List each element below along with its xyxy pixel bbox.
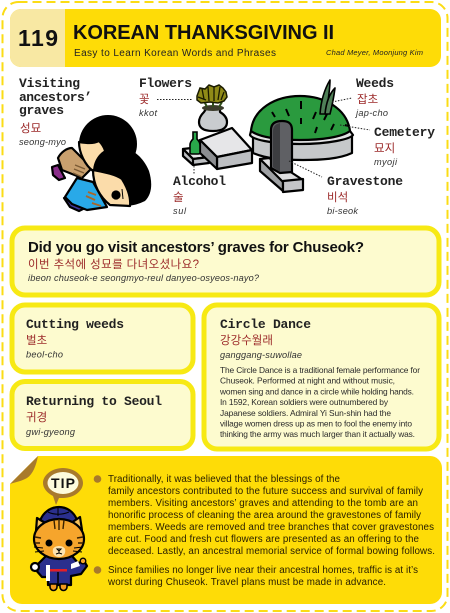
question Korean: 이번 추석에 성묘를 다녀오셨나요? bbox=[28, 258, 199, 271]
panel: returning to Seoul: Returning to Seoul bbox=[26, 394, 162, 409]
bullet one bbox=[94, 475, 101, 483]
illustration: stone altar and small table bbox=[183, 128, 252, 169]
label: Alcohol: Alcohol bbox=[173, 174, 226, 189]
tip text: honorific process of cleaning the area around the gravestones of family bbox=[108, 510, 421, 521]
subtitle: Easy to Learn Korean Words and Phrases bbox=[74, 48, 276, 59]
label: Gravestone bbox=[289, 161, 403, 216]
icon: tiger mascot bbox=[31, 507, 87, 590]
circle dance description: women sing and dance in a circle while holding hands. bbox=[219, 386, 414, 396]
panel: tip bbox=[10, 456, 442, 604]
panel: circle dance: Circle Dance bbox=[220, 317, 311, 332]
tip text: deceased. Lastly, an ancestral memorial service of formal bowing follows. bbox=[108, 546, 435, 557]
label: Flowers: 꽃 bbox=[139, 93, 150, 106]
label: Visiting ancestors' graves bbox=[19, 76, 92, 147]
label: Weeds: Weeds bbox=[356, 76, 394, 91]
icon: green bottle bbox=[190, 132, 200, 154]
label: Visiting ancestors' graves: Visiting bbox=[19, 76, 80, 91]
panel: circle dance bbox=[204, 305, 439, 449]
label: Gravestone: 비석 bbox=[327, 191, 348, 204]
label: Gravestone: bi-seok bbox=[327, 206, 358, 216]
question romanization: ibeon chuseok-e seongmyo-reul danyeo-osyeos-nayo? bbox=[28, 273, 260, 283]
issue number: 119 bbox=[18, 25, 58, 51]
illustration: flowers and vase bbox=[197, 85, 227, 131]
label: Visiting ancestors' graves: seong-myo bbox=[19, 137, 66, 147]
bullet two bbox=[94, 566, 101, 574]
authors: Chad Meyer, Moonjung Kim bbox=[326, 48, 423, 57]
panel: returning to Seoul: gwi-gyeong bbox=[26, 427, 76, 437]
panel: circle dance: ganggang-suwollae bbox=[220, 350, 302, 360]
label: Cemetery: myoji bbox=[374, 157, 398, 167]
panel: cutting weeds: Cutting weeds bbox=[26, 317, 124, 332]
tip text: worst during Chuseok. Travel plans must be made in advance. bbox=[107, 577, 386, 588]
tip text: members. Visiting ancestors’ graves and attending to the tomb are an bbox=[108, 498, 418, 509]
label: Flowers: Flowers bbox=[139, 76, 192, 91]
label: Visiting ancestors' graves: 성묘 bbox=[20, 122, 41, 135]
label: Weeds bbox=[332, 76, 394, 118]
label: Visiting ancestors' graves: ancestors’ bbox=[19, 90, 92, 105]
tip text: Traditionally, it was believed that the blessings of the bbox=[108, 474, 341, 485]
label: Cemetery: Cemetery bbox=[374, 125, 435, 140]
panel: question bbox=[12, 228, 439, 295]
circle dance description: Chuseok. Performed at night and without music, bbox=[220, 376, 395, 386]
panel: returning to Seoul bbox=[12, 382, 193, 448]
circle dance description: In 1592, Korean soldiers were outnumbered by bbox=[220, 397, 389, 407]
illustration: gravestone bbox=[260, 121, 303, 192]
label: Visiting ancestors' graves: graves bbox=[19, 103, 64, 118]
circle dance description: The Circle Dance is a traditional female performance for bbox=[220, 365, 420, 375]
label: Flowers: kkot bbox=[139, 108, 157, 118]
title: KOREAN THANKSGIVING II bbox=[73, 22, 334, 44]
label: Alcohol bbox=[173, 166, 226, 216]
label: Cemetery bbox=[340, 125, 435, 167]
label: Weeds: 잡초 bbox=[357, 93, 378, 106]
label: Alcohol: 술 bbox=[173, 191, 184, 204]
label: Alcohol: sul bbox=[173, 206, 187, 216]
label: Gravestone: Gravestone bbox=[327, 174, 403, 189]
label: Flowers bbox=[139, 76, 193, 118]
circle dance description: thinking the army was much larger than it actually was. bbox=[220, 429, 415, 439]
header banner bbox=[10, 9, 441, 67]
folded corner bbox=[10, 456, 38, 484]
tip text: are cut. Food and fresh cut flowers are presented as an offering to the bbox=[108, 534, 420, 545]
tip text: Since families no longer live near their ancestral homes, traffic is at it’s bbox=[108, 565, 418, 576]
icon: TIP speech bubble: TIP bbox=[51, 475, 75, 491]
panel: returning to Seoul: 귀경 bbox=[26, 410, 47, 424]
illustration: burial mound and stone ring bbox=[250, 80, 353, 160]
illustration: two people bowing bbox=[52, 115, 151, 211]
panel: cutting weeds: beol-cho bbox=[26, 350, 63, 360]
circle dance description: village women dress up as men to fool the enemy into bbox=[220, 418, 412, 428]
tip text: members. Weeds are removed and tree branches that cover gravestones bbox=[108, 522, 434, 533]
label: Weeds: jap-cho bbox=[354, 108, 388, 118]
circle dance description: Japanese soldiers. Admiral Yi Sun-shin had the bbox=[220, 408, 391, 418]
tip text: family ancestors contributed to the future success and survival of family bbox=[108, 486, 423, 497]
icon: TIP speech bubble bbox=[43, 468, 83, 505]
panel: cutting weeds bbox=[12, 305, 193, 372]
panel: circle dance: 강강수월래 bbox=[220, 334, 273, 347]
panel: cutting weeds: 벌초 bbox=[26, 334, 47, 347]
question text: Did you go visit ancestors’ graves for Chuseok? bbox=[28, 239, 364, 256]
label: Cemetery: 묘지 bbox=[374, 142, 395, 155]
